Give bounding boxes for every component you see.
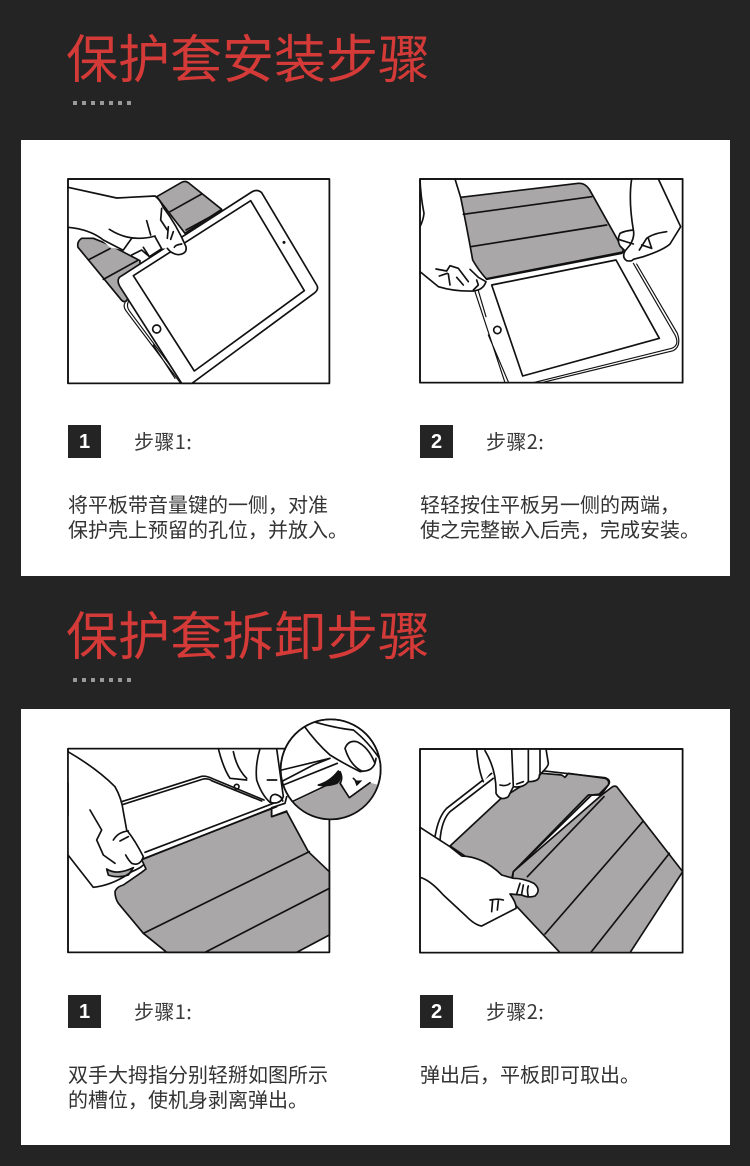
badge: step 1 [68,425,101,458]
instruction text 1 [68,489,348,543]
badge: step 2: 2 [431,1001,442,1023]
step label 1: 步骤1: [134,426,192,455]
title: install: 保护套安装步骤 [66,18,430,93]
badge: step 2: 2 [431,431,442,453]
badge: step 1: 1 [79,1001,90,1023]
step label 2: 步骤2: [486,996,544,1025]
instruction text 1: 双手大拇指分别轻掰如图所示 [68,1059,328,1088]
illustration: install step 1 [67,178,330,384]
step label 2: 步骤2: [486,426,544,455]
badge: step 2 [420,995,453,1028]
panel: removal steps [21,709,730,1145]
step label 1: 步骤1: [134,996,192,1025]
badge: step 2 [420,425,453,458]
dotted accent [73,101,131,105]
instruction text 1 [68,1059,328,1113]
instruction text 2: 弹出后，平板即可取出。 [420,1059,640,1088]
instruction text 2: 轻轻按住平板另一侧的两端， [420,489,680,518]
instruction text 1: 将平板带音量键的一侧，对准 [68,489,328,518]
panel: install steps [21,140,730,576]
instruction text 1: 保护壳上预留的孔位，并放入。 [68,514,348,543]
instruction text 1: 的槽位，使机身剥离弹出。 [68,1084,308,1113]
instruction text 2: 使之完整嵌入后壳，完成安装。 [420,514,700,543]
dotted accent [73,678,131,682]
illustration: removal step 1 [67,718,382,954]
illustration: removal step 2 [419,748,684,954]
badge: step 1 [68,995,101,1028]
instruction text 2 [420,489,700,543]
title: removal: 保护套拆卸步骤 [66,595,430,670]
illustration: install step 2 [419,178,684,384]
badge: step 1: 1 [79,431,90,453]
